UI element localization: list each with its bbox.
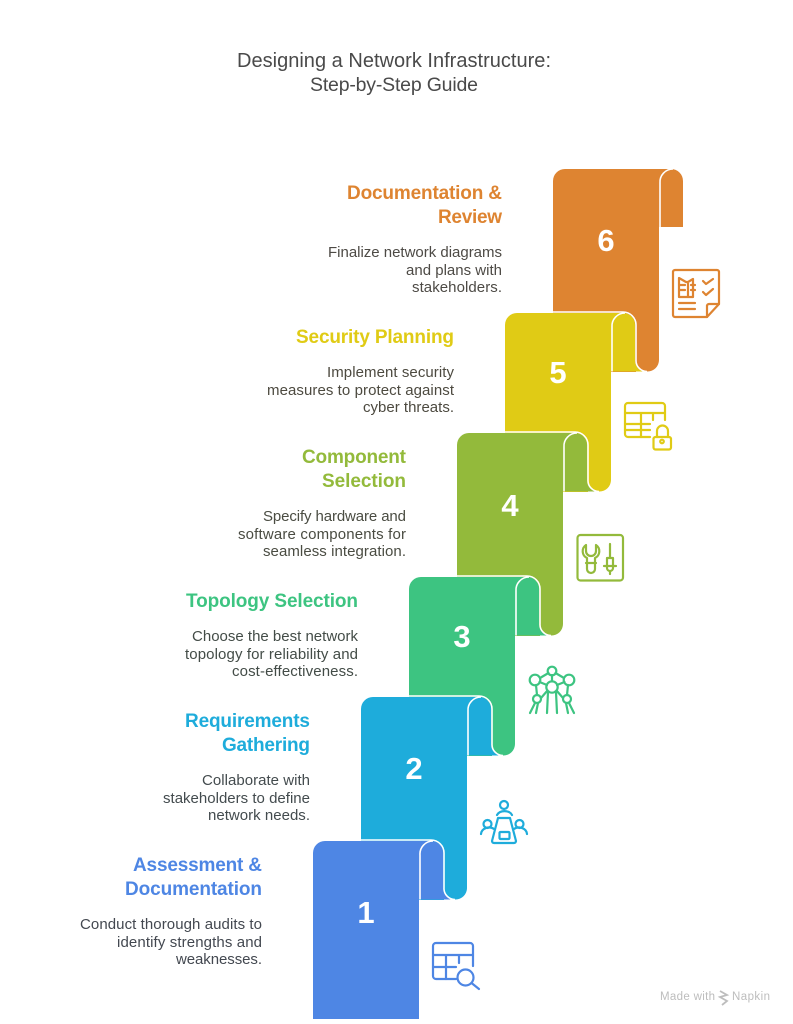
description 2: network needs. bbox=[208, 807, 310, 824]
ribbon 3 bbox=[409, 576, 551, 756]
heading 4: Component bbox=[302, 447, 407, 468]
icon: napkin logo bbox=[720, 991, 727, 1005]
description 1 bbox=[80, 916, 262, 968]
description 4: Specify hardware and bbox=[263, 508, 406, 525]
number 4: 4 bbox=[501, 488, 519, 523]
step 3: topology selection bbox=[185, 576, 574, 756]
step 5: security planning bbox=[267, 312, 671, 492]
description 2 bbox=[163, 772, 310, 824]
description 3: Choose the best network bbox=[192, 628, 358, 645]
description 6: Finalize network diagrams bbox=[328, 244, 502, 261]
title bbox=[237, 50, 551, 96]
heading 3: Topology Selection bbox=[186, 591, 358, 612]
description 1: weaknesses. bbox=[175, 951, 262, 968]
heading 2: Gathering bbox=[222, 735, 310, 756]
title: Designing a Network Infrastructure: bbox=[237, 50, 551, 72]
ribbon 1 bbox=[313, 840, 455, 1019]
icon: network atom bbox=[530, 667, 574, 713]
footer: made with napkin: Made with bbox=[660, 991, 715, 1003]
step 1: assessment and documentation bbox=[80, 840, 479, 1019]
icon: meeting table bbox=[481, 801, 527, 843]
step 4: component selection bbox=[238, 432, 623, 636]
description 2: Collaborate with bbox=[202, 772, 310, 789]
description 5 bbox=[267, 364, 455, 416]
heading 4: Selection bbox=[322, 471, 406, 492]
icon: tools bbox=[578, 535, 623, 580]
footer: made with napkin bbox=[660, 991, 770, 1005]
description 5: Implement security bbox=[327, 364, 454, 381]
heading 4 bbox=[302, 447, 407, 492]
icon: document checklist bbox=[673, 270, 719, 317]
ribbon 2 bbox=[361, 696, 503, 900]
step 2: requirements gathering bbox=[163, 696, 527, 900]
heading 1 bbox=[125, 855, 262, 900]
description 6 bbox=[328, 244, 502, 296]
description 6: stakeholders. bbox=[412, 279, 502, 296]
number 1: 1 bbox=[357, 895, 375, 930]
icon: table with lock bbox=[625, 403, 671, 450]
heading 1: Documentation bbox=[125, 879, 262, 900]
heading 6 bbox=[347, 183, 502, 228]
heading 2: Requirements bbox=[185, 711, 310, 732]
number 6: 6 bbox=[597, 223, 615, 258]
heading 1: Assessment & bbox=[133, 855, 262, 876]
number 3: 3 bbox=[453, 619, 471, 654]
heading 6: Documentation & bbox=[347, 183, 502, 204]
number 5: 5 bbox=[549, 355, 567, 390]
description 4: software components for bbox=[238, 526, 406, 543]
description 5: cyber threats. bbox=[363, 399, 454, 416]
ribbon 6 bbox=[553, 169, 683, 372]
step 6: documentation and review bbox=[328, 169, 719, 372]
description 1: Conduct thorough audits to bbox=[80, 916, 262, 933]
heading 5: Security Planning bbox=[296, 327, 454, 348]
ribbon 4 bbox=[457, 432, 599, 636]
description 5: measures to protect against bbox=[267, 382, 455, 399]
title: Step-by-Step Guide bbox=[310, 74, 478, 96]
description 3 bbox=[185, 628, 358, 680]
description 1: identify strengths and bbox=[117, 934, 262, 951]
description 3: cost-effectiveness. bbox=[232, 663, 358, 680]
footer: made with napkin: Napkin bbox=[732, 991, 770, 1003]
description 4: seamless integration. bbox=[263, 543, 406, 560]
description 4 bbox=[238, 508, 406, 560]
heading 2 bbox=[185, 711, 310, 756]
heading 6: Review bbox=[438, 207, 502, 228]
number 2: 2 bbox=[405, 751, 423, 786]
description 2: stakeholders to define bbox=[163, 790, 310, 807]
description 3: topology for reliability and bbox=[185, 646, 358, 663]
description 6: and plans with bbox=[406, 262, 502, 279]
icon: table with magnifier bbox=[433, 943, 479, 989]
ribbon 5 bbox=[505, 312, 647, 492]
